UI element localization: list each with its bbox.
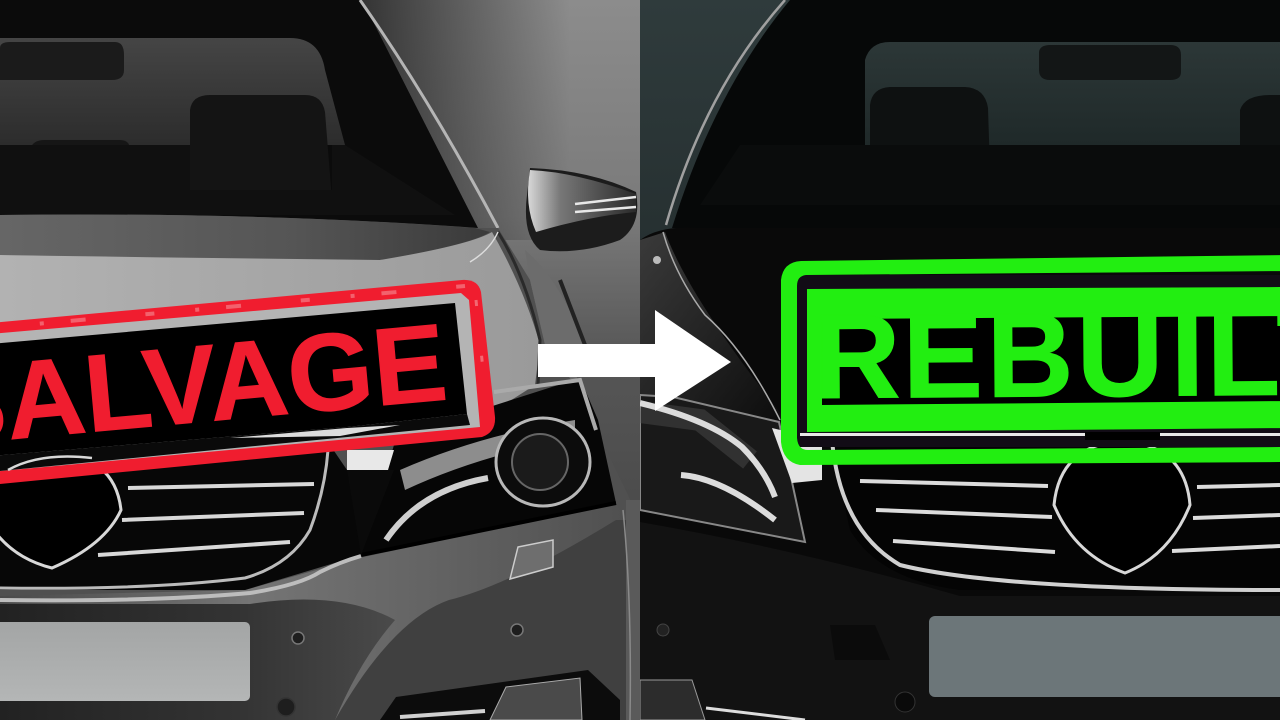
washer cap: [510, 540, 553, 579]
grille: [0, 445, 361, 600]
grille: [830, 440, 1280, 590]
lower bumper: [640, 522, 1280, 720]
fog lamp: [380, 670, 620, 720]
headlight: [330, 378, 616, 555]
windshield: [666, 0, 1280, 228]
windshield: [0, 0, 498, 228]
license plate: [0, 622, 250, 701]
stamp: salvage: [0, 280, 495, 485]
hood and body: [640, 228, 1280, 596]
hood: [0, 214, 587, 596]
fog lamp: [640, 680, 705, 720]
parking sensors: [277, 624, 523, 716]
icon: side mirror: [526, 168, 637, 251]
license plate: [929, 616, 1280, 697]
stamp: rebuilt: [781, 255, 1280, 465]
arrow: [538, 310, 731, 411]
headlight: [640, 395, 822, 542]
panel: salvage car: [0, 0, 640, 720]
lower bumper: [0, 500, 640, 720]
panel: rebuilt car: [640, 0, 1280, 720]
